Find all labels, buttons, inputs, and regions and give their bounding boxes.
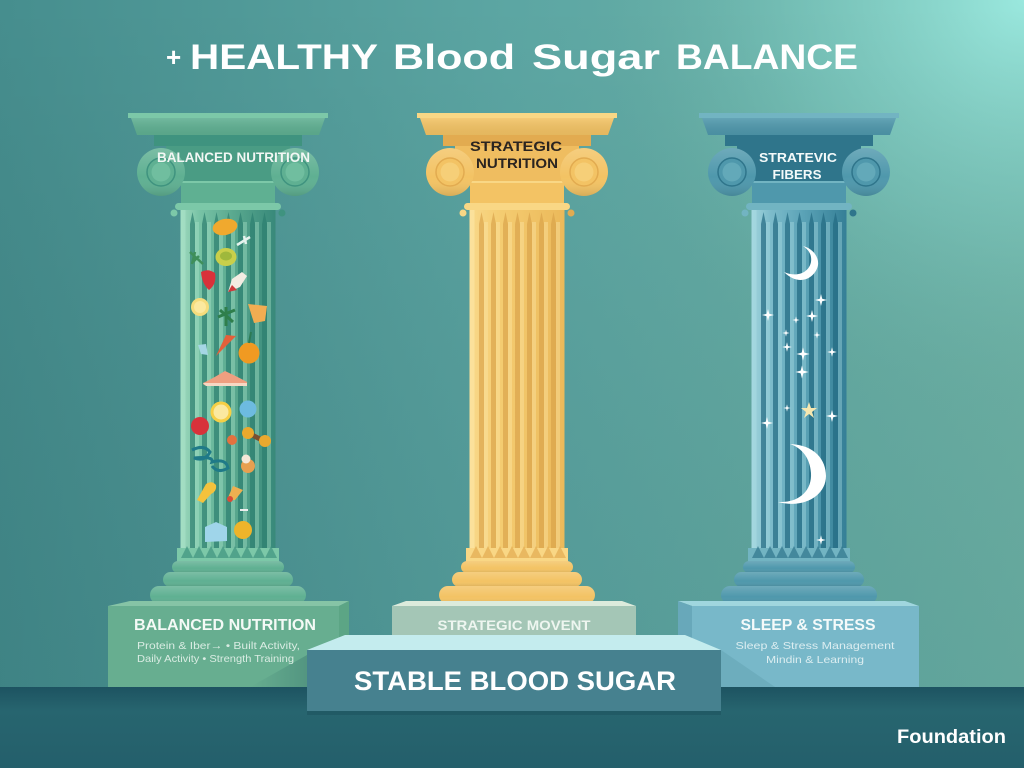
panel: green nutrition pillar: [128, 113, 328, 604]
panel: gold movement pillar: [417, 113, 617, 604]
pillar label: strategic fibers: STRATEVIC: [759, 150, 838, 165]
plinth description: Protein & Iber→ • Built Activity,: [137, 640, 300, 652]
plinth description: [137, 640, 300, 665]
title: +: [166, 42, 181, 72]
title: Blood: [393, 38, 515, 77]
panel: blue sleep pillar: [699, 113, 899, 604]
pillar label: strategic fibers: [759, 150, 838, 182]
title: BALANCE: [676, 38, 858, 77]
plinth description: Mindin & Learning: [766, 654, 864, 666]
pillar label: balanced nutrition: BALANCED NUTRITION: [157, 150, 310, 165]
base heading: STABLE BLOOD SUGAR: [354, 666, 676, 696]
panel: green plinth: [108, 601, 349, 687]
icons: food items on green pillar: [190, 217, 271, 542]
title: HEALTHY: [190, 38, 378, 77]
floor band: [0, 687, 1024, 768]
plinth heading: BALANCED NUTRITION: [134, 617, 316, 634]
panel: gold plinth: [392, 601, 636, 639]
plinth description: Sleep & Stress Management: [736, 640, 895, 652]
plinth description: [736, 640, 895, 666]
plinth heading: SLEEP & STRESS: [740, 617, 876, 634]
pillar label: strategic nutrition: NUTRITION: [476, 155, 558, 171]
icons: moons and stars on blue pillar: [761, 246, 838, 545]
pillar label: strategic nutrition: [470, 138, 562, 171]
foundation label: Foundation: [897, 727, 1006, 748]
title: [166, 38, 858, 77]
title: Sugar: [532, 38, 660, 77]
plinth heading: STRATEGIC MOVENT: [438, 617, 591, 633]
plinth description: Daily Activity • Strength Training: [137, 653, 294, 665]
pillar label: strategic fibers: FIBERS: [772, 167, 822, 182]
pillar label: strategic nutrition: STRATEGIC: [470, 138, 562, 154]
panel: blue plinth: [678, 601, 919, 687]
panel: stable blood sugar base: [307, 635, 721, 715]
